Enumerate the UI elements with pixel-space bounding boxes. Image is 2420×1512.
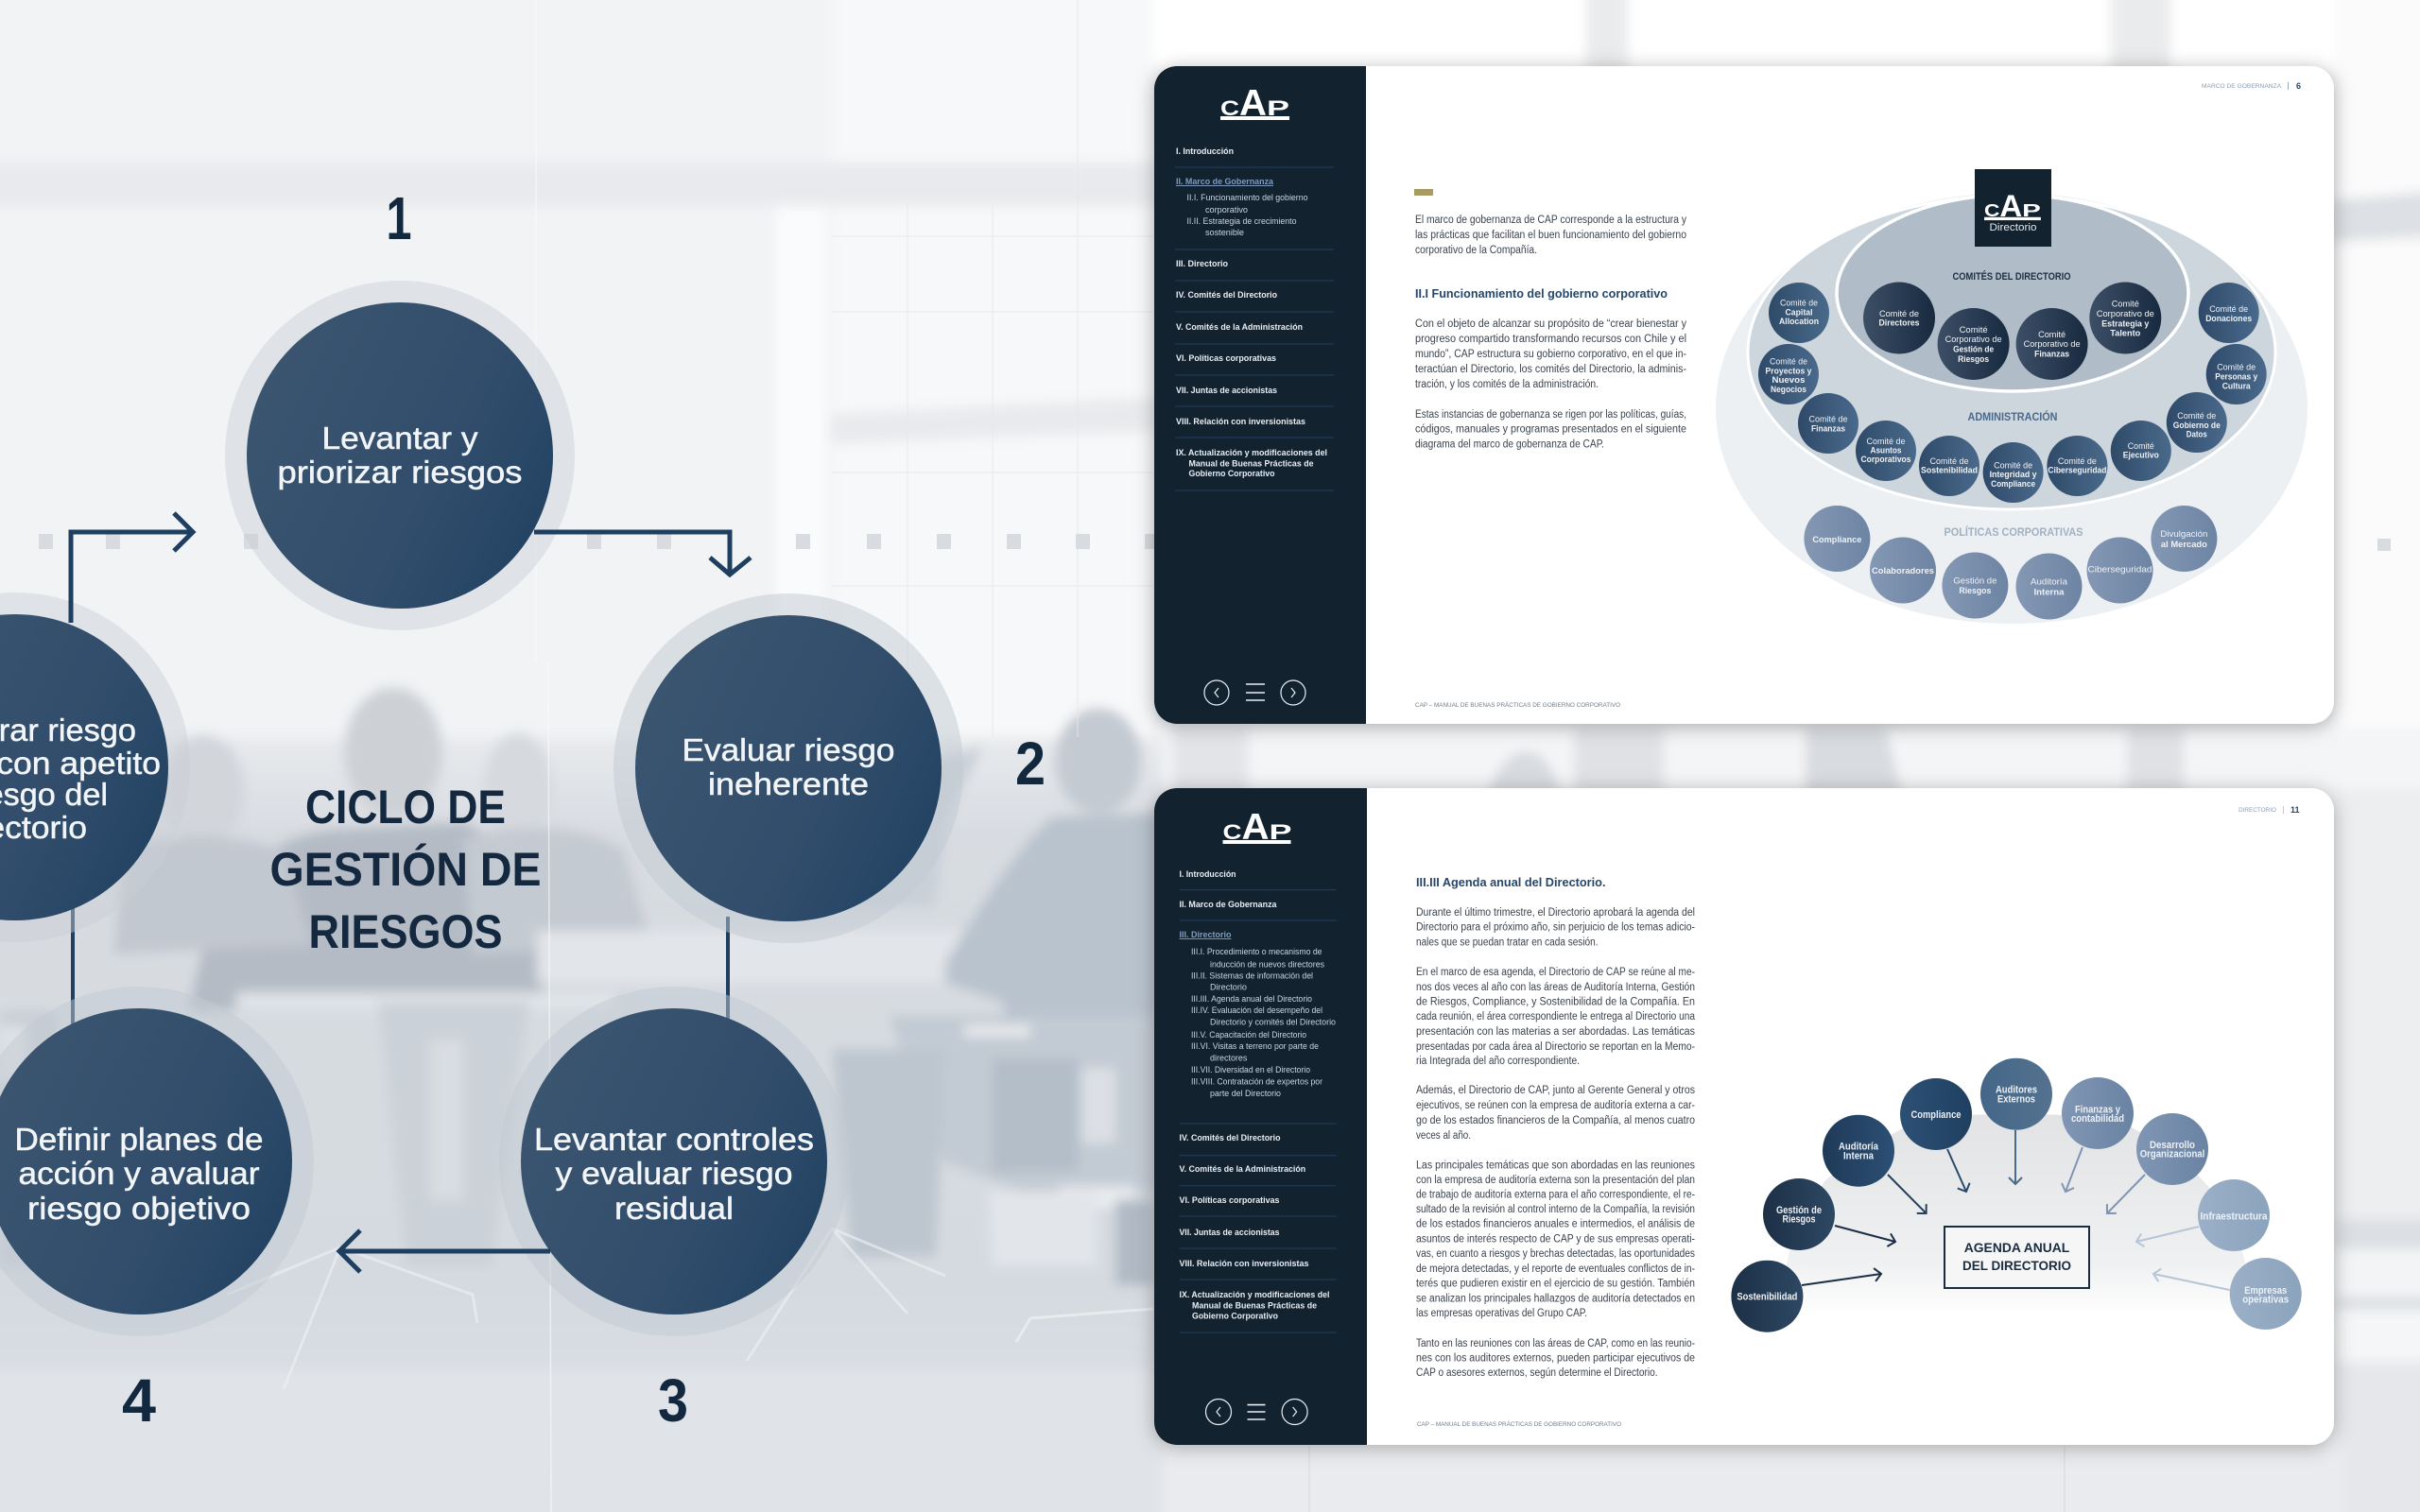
sidebar navigation: II.I. Funcionamiento del gobierno (1187, 193, 1308, 202)
page header: 6 (2296, 81, 2301, 91)
sidebar navigation: III. Directorio (1180, 930, 1232, 940)
stakeholder circles: Interna (1843, 1150, 1875, 1161)
sidebar logo: A (1239, 83, 1267, 124)
sidebar navigation: III.III. Agenda anual del Directorio (1191, 994, 1312, 1004)
administration committees circles: Comité de (2177, 411, 2216, 421)
step 1 circle: Levantar y (321, 421, 478, 455)
administration committees circles: Comité de (2217, 363, 2256, 372)
sidebar navigation: III.IV. Evaluación del desempeño del (1191, 1005, 1322, 1015)
administration committees circles: Comité (2128, 441, 2154, 452)
directorio box: P (2022, 201, 2041, 220)
body text: vas, en cuanto a riesgos y brechas detectadas, las oportunidades (1416, 1248, 1695, 1260)
sidebar navigation: Manual de Buenas Prácticas de (1192, 1300, 1317, 1311)
body text: de trabajo de auditoría externa para el año correspondiente, el re- (1416, 1189, 1695, 1200)
directors committees circles: Comité (2038, 330, 2066, 340)
corporate policies circles: Divulgación (2160, 529, 2207, 540)
administration committees circles: Comité de (2058, 456, 2097, 467)
page header: 11 (2290, 805, 2300, 815)
central title (270, 781, 541, 958)
decorative dotted line (39, 534, 2391, 551)
arrow: step 1 to step 2 (534, 532, 751, 575)
label: políticas corporativas: POLÍTICAS CORPORATIVAS (1944, 524, 2083, 539)
administration committees circles: Ciberseguridad (2048, 465, 2107, 476)
body paragraph 2: diagrama del marco de gobernanza de CAP. (1415, 438, 1604, 450)
body text: Directorio para el próximo año, sin perjuicio de los temas adicio- (1416, 922, 1695, 934)
corporate policies circles: al Mercado (2161, 540, 2207, 550)
label: administración: ADMINISTRACIÓN (1968, 409, 2057, 423)
sidebar (1154, 788, 1367, 1445)
corporate policies circles: Riesgos (1959, 586, 1991, 596)
sidebar navigation: VI. Políticas corporativas (1180, 1195, 1280, 1206)
step 4 circle (0, 987, 314, 1336)
number 3: 3 (658, 1366, 688, 1435)
administration committees circles: Proyectos y (1766, 367, 1812, 376)
administration committees circles: Comité de (1930, 456, 1968, 467)
body paragraph (1415, 318, 1686, 390)
sidebar logo (1223, 807, 1291, 848)
body paragraph 2: Estas instancias de gobernanza se rigen por las políticas, guías, (1415, 409, 1686, 421)
body text: go de los estados financieros de la Compañía, al menos cuatro (1416, 1115, 1695, 1126)
directors committees circles: Riesgos (1958, 354, 1989, 365)
body text (1416, 907, 1696, 1379)
sidebar logo (1220, 83, 1289, 124)
card background (1154, 66, 2334, 724)
body text: asuntos de interés respecto de CAP y de sus empresas operati- (1416, 1234, 1695, 1246)
footer: CAP – MANUAL DE BUENAS PRÁCTICAS DE GOBIERNO CORPORATIVO (1417, 1419, 1621, 1428)
stakeholder circles: Empresas (2244, 1285, 2287, 1297)
administration committees circles: Negocios (1771, 385, 1806, 395)
diagram: agenda anual (1731, 1058, 2302, 1332)
body text: de mejora detectadas, y el reporte de eventuales conflictos de in- (1416, 1263, 1695, 1275)
body text: las empresas operativas del Grupo CAP. (1416, 1308, 1587, 1319)
sidebar navigation: III.VIII. Contratación de expertos por (1191, 1077, 1322, 1087)
sidebar navigation: Gobierno Corporativo (1192, 1311, 1278, 1321)
body text: presentadas por cada área al Directorio se reportan en la Memo- (1416, 1041, 1695, 1053)
body text: Además, el Directorio de CAP, junto al Gerente General y otros (1416, 1085, 1695, 1096)
administration committees circles: Gobierno de (2173, 421, 2221, 431)
directors committees circles: Estrategia y (2101, 319, 2150, 329)
sidebar logo: P (1267, 96, 1289, 120)
body text: cada reunión, el área correspondiente le entrega al Directorio una (1416, 1011, 1696, 1022)
administration committees circles: Comité de (1994, 461, 2032, 471)
sidebar navigation: VI. Políticas corporativas (1176, 353, 1276, 364)
agenda box (1945, 1227, 2089, 1288)
administration committees circles: Comité de (1770, 357, 1807, 367)
sidebar navigation: IX. Actualización y modificaciones del (1180, 1290, 1329, 1300)
administration committees circles: Asuntos (1870, 446, 1902, 455)
administration committees circles (1758, 283, 2267, 503)
central title: CICLO DE (305, 781, 506, 833)
step 2 circle: ineherente (708, 766, 869, 801)
administration committees circles: Comité de (2209, 304, 2248, 315)
sidebar navigation: III.II. Sistemas de información del (1191, 971, 1313, 981)
stakeholder circles: Organizacional (2140, 1149, 2204, 1160)
step 5 circle (cropped) (0, 593, 190, 942)
intro paragraph: corporativo de la Compañía. (1415, 245, 1537, 256)
agenda box: AGENDA ANUAL (1964, 1240, 2070, 1255)
sidebar navigation: IV. Comités del Directorio (1176, 290, 1277, 301)
sidebar navigation: Directorio (1210, 983, 1247, 992)
body paragraph: teractúan el Directorio, los comités del Directorio, la adminis- (1415, 364, 1686, 375)
administration committees circles: Capital (1785, 308, 1813, 318)
number 2: 2 (1015, 730, 1046, 798)
stakeholder circles: Finanzas y (2075, 1104, 2121, 1115)
administration committees circles: Finanzas (1811, 423, 1845, 435)
sidebar navigation: VII. Juntas de accionistas (1180, 1228, 1280, 1238)
panel: manual page 6, marco de gobernanza (1154, 66, 2334, 724)
sidebar navigation: III.VI. Visitas a terreno por parte de (1191, 1041, 1319, 1051)
agenda box: DEL DIRECTORIO (1962, 1258, 2071, 1273)
directors committees circles: Directores (1879, 318, 1919, 329)
intro paragraph: las prácticas que facilitan el buen funcionamiento del gobierno (1415, 230, 1686, 241)
administration committees circles: Ejecutivo (2123, 450, 2159, 461)
body paragraph 2 (1415, 409, 1686, 450)
directors committees circles: Corporativo de (2097, 309, 2154, 319)
stakeholder circles: Auditoría (1839, 1142, 1879, 1153)
administration committees circles: Comité de (1809, 414, 1847, 425)
directors committees circles: Talento (2110, 329, 2140, 338)
corporate policies circles: Gestión de (1953, 576, 1996, 586)
step 4 circle: riesgo objetivo (27, 1191, 251, 1226)
diagram: marco de gobernanza ellipses (1716, 169, 2308, 624)
administration committees circles: Comité de (1866, 437, 1906, 447)
step 2 circle: Evaluar riesgo (683, 732, 894, 767)
body text: de Riesgos, Compliance, y Sostenibilidad de la Compañía. En (1416, 997, 1695, 1008)
connector lines behind circles (73, 907, 728, 1025)
corporate policies circles: Colaboradores (1872, 566, 1934, 576)
step 4 circle: Definir planes de (15, 1122, 263, 1157)
body text: presentación con las materias a ser abordadas. Las temáticas (1416, 1026, 1695, 1038)
body text: Durante el último trimestre, el Directorio aprobará la agenda del (1416, 907, 1695, 919)
corporate policies circles (1804, 506, 2217, 620)
body paragraph: tración, y los comités de la administración. (1415, 379, 1599, 390)
directors committees circles: Corporativo de (1945, 335, 2002, 345)
body text: ria Integrada del año correspondiente. (1416, 1056, 1580, 1067)
sidebar navigation: I. Introducción (1176, 146, 1234, 157)
directors committees circles: Finanzas (2034, 350, 2069, 359)
sidebar logo: C (1223, 820, 1242, 844)
stakeholder circles: Compliance (1911, 1109, 1961, 1121)
sidebar logo: C (1220, 96, 1239, 120)
stakeholder circles: Auditores (1996, 1085, 2037, 1096)
body text: sultado de la revisión al control interno de la Compañía, la revisión (1416, 1204, 1695, 1215)
directors committees circles: Comité de (1879, 309, 1919, 319)
administration committees circles: Integridad y (1990, 470, 2037, 480)
directorio box: C (1984, 201, 1999, 220)
step 3 circle: residual (614, 1191, 734, 1226)
body text: Tanto en las reuniones con las áreas de CAP, como en las reunio- (1416, 1338, 1695, 1349)
directors committees circles: Comité (2112, 299, 2139, 310)
card background (1154, 788, 2334, 1445)
body text: de los estados financieros anuales e intermedios, el análisis de (1416, 1219, 1695, 1230)
intro paragraph: El marco de gobernanza de CAP corresponde a la estructura y (1415, 215, 1686, 226)
sidebar navigation: III.V. Capacitación del Directorio (1191, 1030, 1306, 1040)
sidebar navigation: Directorio y comités del Directorio (1210, 1018, 1336, 1027)
panel: manual page 11, agenda anual del directorio (1154, 788, 2334, 1445)
step 3 circle (499, 987, 849, 1336)
stakeholder circles: Sostenibilidad (1737, 1291, 1797, 1302)
stakeholder circles: Gestión de (1776, 1205, 1822, 1216)
body text: nes con los auditores externos, pueden participar ejecutivos de (1416, 1353, 1695, 1365)
sidebar navigation: IV. Comités del Directorio (1180, 1133, 1281, 1143)
sidebar navigation: III.I. Procedimiento o mecanismo de (1191, 947, 1322, 956)
sidebar navigation: corporativo (1205, 205, 1248, 215)
sidebar navigation: II. Marco de Gobernanza (1180, 900, 1277, 910)
section heading: II.I Funcionamiento del gobierno corporativo (1415, 286, 1668, 301)
background: chair legs and glass lines (227, 0, 2065, 1512)
sidebar navigation: parte del Directorio (1210, 1089, 1281, 1098)
administration committees circles: Datos (2187, 429, 2207, 440)
arrows into agenda box (1802, 1130, 2229, 1290)
navigation icons (1206, 1399, 1307, 1425)
number 4: 4 (122, 1366, 156, 1435)
directors committees circles: Comité (1960, 325, 1988, 335)
label: comités del directorio: COMITÉS DEL DIRECTORIO (1953, 270, 2071, 283)
sidebar navigation: III.VII. Diversidad en el Directorio (1191, 1065, 1310, 1074)
diagram: ciclo de gestión de riesgos (0, 184, 1046, 1435)
directors committees circles: Gestión de (1953, 344, 1994, 355)
administration committees circles: Allocation (1779, 317, 1819, 327)
sidebar navigation: directores (1210, 1054, 1248, 1063)
sidebar navigation: inducción de nuevos directores (1210, 960, 1324, 970)
intro paragraph (1415, 215, 1686, 256)
step 1 circle (225, 281, 575, 630)
sidebar navigation: Gobierno Corporativo (1189, 469, 1275, 479)
step 4 circle: acción y avaluar (19, 1156, 260, 1191)
outer ellipse (1716, 193, 2308, 624)
directors committees circles: Corporativo de (2024, 339, 2081, 350)
body paragraph 2: códigos, manuales y programas presentados en el siguiente (1415, 423, 1686, 435)
stakeholder circles: operativas (2242, 1294, 2289, 1305)
sidebar navigation: IX. Actualización y modificaciones del (1176, 448, 1327, 458)
administration committees circles: Personas y (2215, 372, 2258, 382)
directors committee ellipse (1837, 195, 2188, 391)
sidebar (1154, 66, 1366, 724)
body paragraph: progreso compartido transformando recursos con Chile y el (1415, 334, 1686, 345)
body text: terés que pudieren existir en el ejercicio de su gestión. También (1416, 1278, 1695, 1289)
stakeholder circles: Desarrollo (2150, 1140, 2195, 1151)
central title: GESTIÓN DE (270, 843, 541, 896)
stakeholder circles: contabilidad (2071, 1113, 2124, 1125)
step 3 circle: Levantar controles (534, 1122, 814, 1157)
section heading: III.III Agenda anual del Directorio. (1416, 875, 1605, 889)
body text: CAP o asesores externos, según determine el Directorio. (1416, 1367, 1658, 1379)
administration committees circles: Cultura (2222, 382, 2251, 391)
directorio box: A (1999, 189, 2022, 223)
administration committees circles: Sostenibilidad (1921, 465, 1978, 476)
sidebar navigation: II.II. Estrategia de crecimiento (1187, 216, 1297, 226)
sidebar navigation: VIII. Relación con inversionistas (1180, 1259, 1308, 1269)
grey dome backdrop (1782, 1114, 2251, 1316)
administration committees circles: Donaciones (2205, 314, 2252, 324)
sidebar navigation: V. Comités de la Administración (1180, 1164, 1305, 1175)
sidebar navigation (1180, 869, 1337, 1332)
corporate policies circles: Ciberseguridad (2087, 565, 2152, 575)
step 1 circle: priorizar riesgos (278, 455, 522, 490)
sidebar navigation: VIII. Relación con inversionistas (1176, 417, 1305, 427)
corporate policies circles: Interna (2034, 588, 2065, 597)
stakeholder circles (1731, 1058, 2302, 1332)
step 3 circle: y evaluar riesgo (556, 1156, 792, 1191)
administration committees circles: Comité de (1780, 299, 1818, 308)
stakeholder circles: Riesgos (1783, 1214, 1815, 1226)
stakeholder circles: Infraestructura (2201, 1211, 2268, 1222)
body text: Las principales temáticas que son abordadas en las reuniones (1416, 1160, 1695, 1172)
sidebar logo: A (1242, 807, 1269, 848)
sidebar navigation: I. Introducción (1180, 869, 1236, 880)
sidebar navigation: V. Comités de la Administración (1176, 322, 1303, 333)
arrow: step 5 to step 1 (71, 513, 193, 623)
sidebar navigation: Manual de Buenas Prácticas de (1189, 459, 1314, 469)
sidebar navigation: II. Marco de Gobernanza (1176, 177, 1274, 187)
administration committees circles: Corporativos (1860, 455, 1911, 465)
sidebar navigation: sostenible (1205, 228, 1244, 237)
directors committees circles (1863, 282, 2161, 380)
administration committees circles: Nuevos (1772, 375, 1806, 386)
gold accent (1414, 189, 1433, 196)
page header (2238, 805, 2300, 815)
directorio box: Directorio (1989, 222, 2036, 233)
sidebar navigation: III. Directorio (1176, 259, 1228, 269)
page header: DIRECTORIO (2238, 807, 2276, 814)
sidebar navigation: VII. Juntas de accionistas (1176, 386, 1277, 396)
body text: veces al año. (1416, 1130, 1471, 1142)
body text: ejecutivos, se reúnen con la empresa de auditoría externa a car- (1416, 1100, 1695, 1111)
body text: se analizan los principales hallazgos de auditoría detectados en (1416, 1294, 1695, 1305)
body text: nales que se puedan tratar en cada sesión. (1416, 937, 1598, 949)
page header (2202, 81, 2301, 91)
footer: CAP – MANUAL DE BUENAS PRÁCTICAS DE GOBIERNO CORPORATIVO (1415, 700, 1620, 709)
body text: En el marco de esa agenda, el Directorio de CAP se reúne al me- (1416, 967, 1695, 978)
arrow: step 3 to step 4 (339, 1230, 550, 1272)
sidebar navigation (1175, 146, 1334, 490)
body text: nos dos veces al año con las áreas de Auditoría Interna, Gestión (1416, 982, 1695, 993)
corporate policies circles: Auditoría (2031, 576, 2068, 588)
stakeholder circles: Externos (1997, 1093, 2035, 1105)
administration ellipse (1748, 196, 2275, 509)
sidebar logo: P (1269, 820, 1291, 844)
directorio box (1975, 169, 2051, 247)
number 1: 1 (386, 184, 412, 252)
body paragraph: mundo”, CAP estructura su gobierno corporativo, en el que in- (1415, 349, 1686, 360)
page header: MARCO DE GOBERNANZA (2202, 83, 2282, 90)
corporate policies circles: Compliance (1812, 535, 1861, 545)
low-frequency people (344, 687, 442, 816)
step 2 circle (614, 593, 963, 943)
central title: RIESGOS (308, 905, 503, 958)
navigation icons (1204, 680, 1305, 705)
body paragraph: Con el objeto de alcanzar su propósito de “crear bienestar y (1415, 318, 1686, 330)
body text: con la empresa de auditoría externa son la presentación del plan (1416, 1175, 1695, 1186)
administration committees circles: Compliance (1991, 479, 2035, 490)
